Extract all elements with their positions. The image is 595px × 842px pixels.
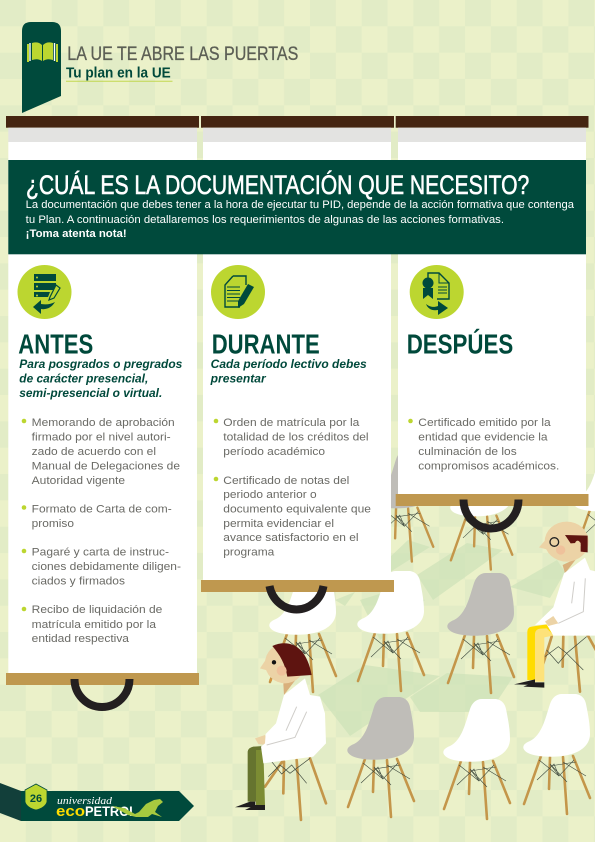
bullet list: Antes: ciones debidamente diligen- (32, 561, 181, 573)
figure: seated man (514, 522, 595, 692)
bullet list: Durante: periodo anterior o (223, 489, 317, 501)
bullet list: Antes: Formato de Carta de com- (32, 504, 172, 516)
subtitle: Tu plan en la UE (66, 64, 171, 81)
bullet list: Durante: totalidad de los créditos del (223, 432, 369, 444)
page number shield: 26 (30, 793, 42, 805)
icon: open book (27, 42, 58, 62)
bullet list: Durante: Orden de matrícula por la (223, 417, 360, 429)
bullet list: Durante (214, 417, 371, 559)
icon: document and pen (211, 265, 265, 319)
figure: seated woman (235, 643, 326, 820)
subheading: Durante: Cada período lectivo debes (211, 359, 367, 371)
panel: Durante (201, 116, 394, 609)
banner: tu Plan. A continuación detallaremos los requerimientos de algunas de las acciones formativas. (26, 214, 504, 226)
chair: white top right (573, 453, 595, 565)
subheading: Antes: Para posgrados o pregrados (19, 359, 182, 371)
floor shadows (318, 540, 565, 736)
panel: Después (396, 116, 588, 528)
banner body text: La documentación que debes tener a la hora de ejecutar tu PID, depende de la acción formativa que contenga (26, 199, 575, 211)
base bar and handle (201, 580, 394, 609)
bullet list: Antes: matrícula emitido por la (32, 619, 157, 631)
heading: Después: DESPÚES (407, 328, 513, 359)
icon: certificate and arrow (410, 265, 464, 319)
bullet list: Antes: zado de acuerdo con el (32, 446, 156, 458)
bookmark with book icon (22, 22, 61, 113)
bullet list: Después (408, 417, 559, 472)
chair: white bottom right (523, 694, 590, 814)
bullet list: Antes: Manual de Delegaciones de (32, 460, 180, 472)
bullet list: Después: Certificado emitido por la (418, 417, 552, 429)
footer ribbon (0, 783, 194, 821)
chair: white top middle (450, 458, 512, 570)
banner (8, 160, 586, 254)
subheading: Durante: presentar (210, 374, 266, 386)
bullet list: Durante: programa (223, 547, 275, 559)
bullet list: Antes: Autoridad vigente (32, 475, 125, 487)
heading: Antes: ANTES (18, 328, 93, 359)
bullet list: Antes: firmado por el nivel autori- (32, 432, 171, 444)
chair: gray bottom row (347, 697, 414, 817)
chair: white second row (357, 571, 424, 691)
title: LA UE TE ABRE LAS PUERTAS (67, 43, 298, 65)
bullet list: Antes: promiso (32, 518, 74, 530)
bullet list: Durante: avance satisfactorio en el (223, 532, 359, 544)
icon: server and pencil (18, 265, 72, 319)
chair: gray top left (371, 450, 433, 562)
bullet list: Durante: período académico (223, 446, 325, 458)
page number shield (25, 784, 47, 810)
bullet list: Antes: ciados y firmados (32, 576, 125, 588)
bullet list: Antes: Recibo de liquidación de (32, 604, 162, 616)
bullet list: Después: compromisos académicos. (418, 460, 559, 472)
bullet list: Antes: Pagaré y carta de instruc- (32, 547, 169, 559)
logo text: universidad (57, 795, 113, 807)
base bar and handle (396, 494, 588, 528)
subheading: Antes: semi-presencial o virtual. (19, 388, 162, 400)
subheading: Antes: de carácter presencial, (19, 374, 148, 386)
chair: white under Durante (269, 572, 336, 692)
heading: Durante: DURANTE (212, 328, 320, 359)
bullet list: Después: culminación de los (418, 446, 517, 458)
bullet list: Antes: Memorando de aprobación (32, 417, 175, 429)
banner note: ¡Toma atenta nota! (26, 228, 127, 240)
bullet list: Durante: permita evidenciar el (223, 518, 334, 530)
bullet list: Durante: Certificado de notas del (223, 475, 349, 487)
base bar and handle (6, 673, 199, 707)
bullet list: Antes: entidad respectiva (32, 633, 130, 645)
chair: gray second row (447, 573, 514, 693)
logo text: PETROL (85, 803, 137, 819)
bullet list: Antes (22, 417, 181, 645)
panel: Antes (6, 116, 199, 707)
logo text (56, 795, 137, 820)
logo text: eco (56, 803, 85, 820)
chair: white bottom row (443, 699, 510, 819)
icon: iguana (112, 799, 163, 817)
bullet list: Durante: documento equivalente que (223, 504, 371, 516)
bullet list: Después: entidad que evidencie la (418, 432, 548, 444)
